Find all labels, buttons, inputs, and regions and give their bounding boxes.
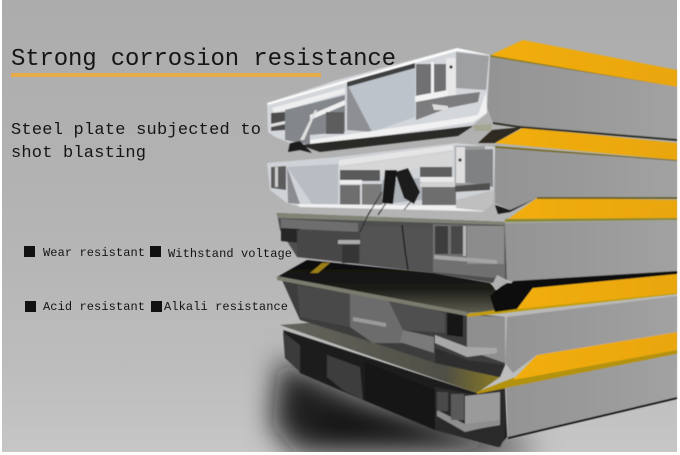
deck 5: bottom [280,322,677,447]
title underline [11,73,321,77]
deck 4 [277,260,677,377]
deck 1: top [267,40,677,153]
description text: shot blasting [11,144,146,163]
deck 2 side and yellow strip [495,128,677,214]
deck 3 [277,198,677,290]
feature: alkali resistance: Alkali resistance [164,300,288,314]
description text: Steel plate subjected to [11,121,261,140]
floor shadow [272,360,535,452]
cable bundle [360,168,420,270]
steel weighbridge deck stack [267,40,677,447]
description text [11,121,261,163]
feature: withstand voltage: Withstand voltage [168,247,292,261]
feature: wear resistant: Wear resistant [43,246,145,260]
white bottom edge [0,452,680,455]
feature: acid resistant: Acid resistant [43,300,145,314]
title: Strong corrosion resistance [11,46,396,73]
deck 2 [267,143,495,212]
